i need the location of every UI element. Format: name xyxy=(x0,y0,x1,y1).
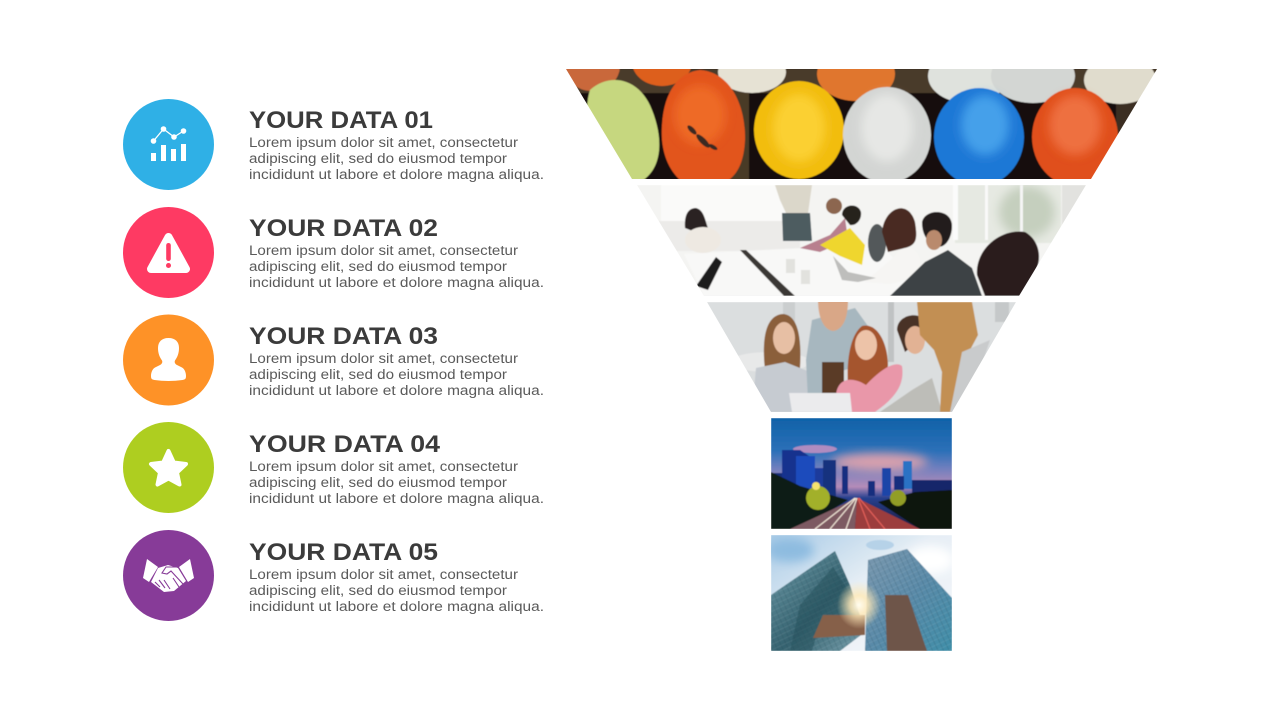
body text 04: adipiscing elit, sed do eiusmod tempor xyxy=(249,475,508,490)
meeting participants xyxy=(685,185,1039,296)
item 01: data chart xyxy=(123,99,544,190)
body text 05: adipiscing elit, sed do eiusmod tempor xyxy=(249,583,508,598)
item 05: handshake xyxy=(123,530,544,621)
heading 05: YOUR DATA 05 xyxy=(249,539,438,566)
heading 04: YOUR DATA 04 xyxy=(249,431,440,458)
photo panel: city at dusk xyxy=(771,418,952,529)
body text 01: incididunt ut labore et dolore magna aliqua. xyxy=(249,167,544,182)
item 02: warning xyxy=(123,207,544,298)
icon: person in orange circle xyxy=(123,314,214,406)
body text 02: Lorem ipsum dolor sit amet, consectetur xyxy=(249,243,519,258)
body text 03: incididunt ut labore et dolore magna aliqua. xyxy=(249,383,544,398)
icon: star in green circle xyxy=(123,422,214,513)
photo panel: hard hats xyxy=(566,69,1157,179)
body text 05: Lorem ipsum dolor sit amet, consectetur xyxy=(249,567,519,582)
body text 04: Lorem ipsum dolor sit amet, consectetur xyxy=(249,459,519,474)
item 03: person xyxy=(123,314,544,406)
body text 03: adipiscing elit, sed do eiusmod tempor xyxy=(249,367,508,382)
body text 02: adipiscing elit, sed do eiusmod tempor xyxy=(249,259,508,274)
heading 01: YOUR DATA 01 xyxy=(249,107,433,134)
body text 05: incididunt ut labore et dolore magna aliqua. xyxy=(249,599,544,614)
body text 02: incididunt ut labore et dolore magna aliqua. xyxy=(249,275,544,290)
photo panel: office meeting xyxy=(630,185,1090,297)
heading 02: YOUR DATA 02 xyxy=(249,215,438,242)
body text 03: Lorem ipsum dolor sit amet, consectetur xyxy=(249,351,519,366)
photo panel: glass towers xyxy=(766,535,954,651)
item 04: star xyxy=(123,422,544,513)
body text 04: incididunt ut labore et dolore magna aliqua. xyxy=(249,491,544,506)
body text 01: adipiscing elit, sed do eiusmod tempor xyxy=(249,151,508,166)
heading 03: YOUR DATA 03 xyxy=(249,323,438,350)
icon: handshake in purple circle xyxy=(123,530,214,621)
icon: warning triangle in red circle xyxy=(123,207,214,298)
body text 01: Lorem ipsum dolor sit amet, consectetur xyxy=(249,135,519,150)
funnel infographic canvas xyxy=(123,69,1157,651)
icon: chart in blue circle xyxy=(123,99,214,190)
photo panel: team around laptop xyxy=(700,300,1020,414)
